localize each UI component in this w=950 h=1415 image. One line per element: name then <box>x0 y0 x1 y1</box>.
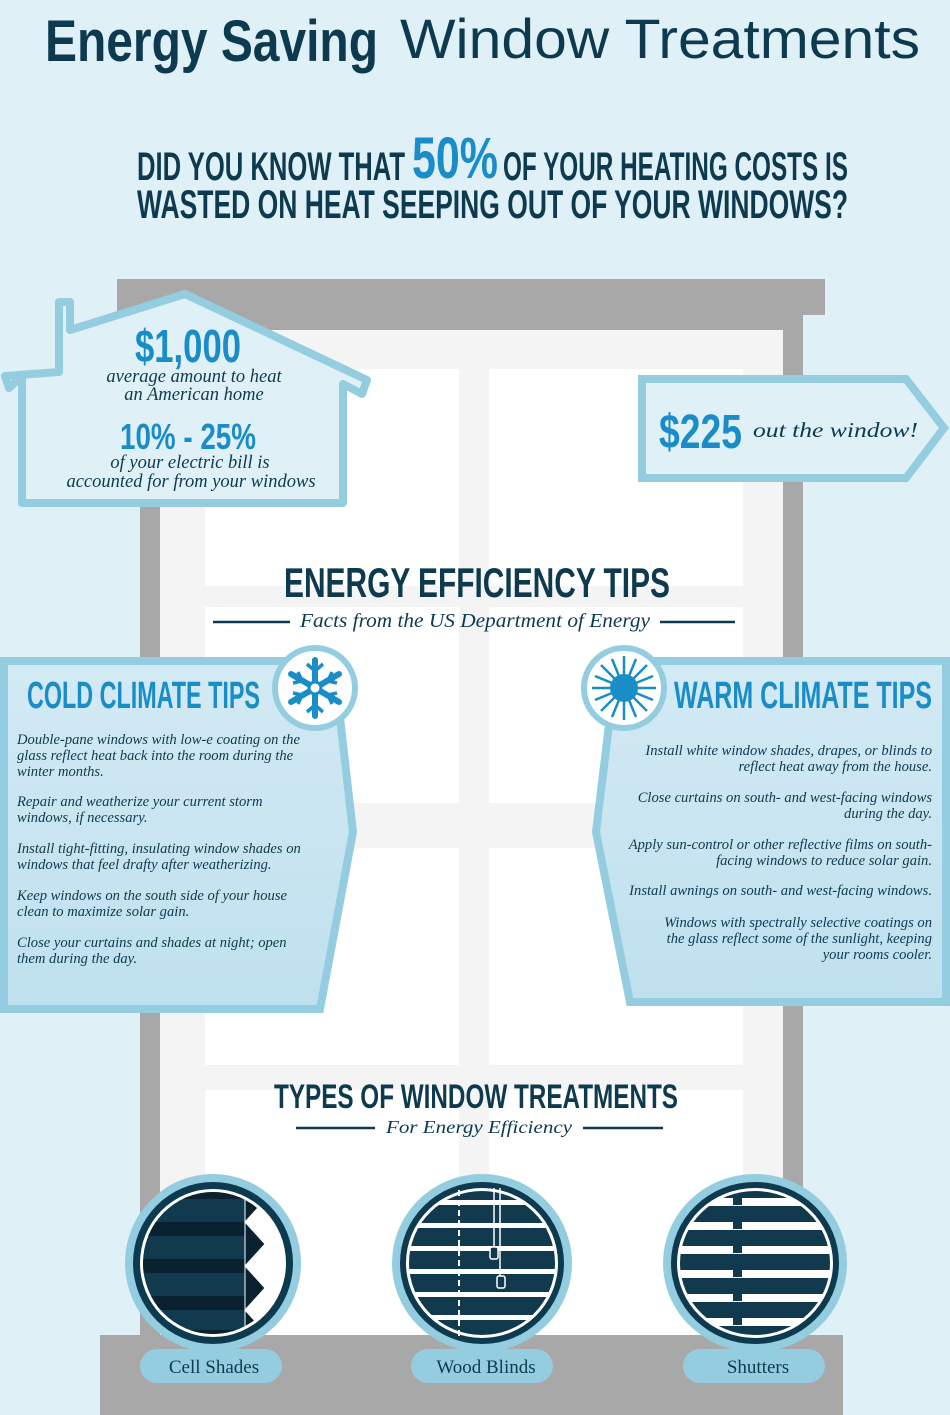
label: cell shades: Cell Shades <box>169 1357 259 1378</box>
panel: cold climate tips: windows, if necessary. <box>17 810 148 826</box>
window frame <box>100 279 843 1415</box>
icon: cell shades <box>125 1174 301 1352</box>
panel: cold climate tips: Keep windows on the south side of your house <box>16 888 287 904</box>
arrow callout: $225: out the window! <box>753 418 918 442</box>
house callout: accounted for from your windows <box>66 472 316 492</box>
panel: warm climate tips: facing windows to reduce solar gain. <box>716 853 932 869</box>
panel: cold climate tips: them during the day. <box>17 951 137 967</box>
panel: warm climate tips: during the day. <box>844 806 932 822</box>
label: shutters: Shutters <box>727 1357 789 1378</box>
house callout: an American home <box>124 385 264 405</box>
panel: cold climate tips: glass reflect heat back into the room during the <box>17 748 294 764</box>
panel: cold climate tips <box>4 648 355 1009</box>
panel: warm climate tips: Install awnings on south- and west-facing windows. <box>628 883 932 899</box>
panel: cold climate tips: clean to maximize solar gain. <box>17 904 189 920</box>
panel: warm climate tips: Windows with spectrally selective coatings on <box>664 915 932 931</box>
label: wood blinds: Wood Blinds <box>436 1357 536 1378</box>
label: cell shades <box>140 1349 282 1383</box>
headline question: 50% <box>412 126 498 191</box>
panel: warm climate tips: reflect heat away from the house. <box>739 759 932 775</box>
panel: cold climate tips: Double-pane windows with low-e coating on the <box>16 732 300 748</box>
heading: energy efficiency tips: ENERGY EFFICIENCY TIPS <box>284 559 670 606</box>
heading: types of window treatments: TYPES OF WINDOW TREATMENTS <box>274 1078 678 1116</box>
panel: warm climate tips: Close curtains on south- and west-facing windows <box>638 790 932 806</box>
panel: warm climate tips <box>584 648 946 1002</box>
title: Energy Saving <box>45 9 378 74</box>
arrow callout: $225 <box>642 379 944 478</box>
heading: types of window treatments: For Energy Efficiency <box>385 1117 572 1137</box>
panel: cold climate tips: Close your curtains and shades at night; open <box>17 935 287 951</box>
icon: wood blinds <box>392 1174 572 1352</box>
heading: energy efficiency tips: Facts from the US Department of Energy <box>299 610 650 632</box>
house callout: 10% - 25% <box>120 416 256 457</box>
panel: warm climate tips: your rooms cooler. <box>821 947 932 963</box>
heading: types of window treatments <box>274 1078 678 1137</box>
panel: cold climate tips: Repair and weatherize your current storm <box>16 794 262 810</box>
panel: warm climate tips: Apply sun-control or other reflective films on south- <box>628 837 932 853</box>
label: shutters <box>683 1349 825 1383</box>
title <box>45 7 920 74</box>
panel: cold climate tips: Install tight-fitting, insulating window shades on <box>16 841 301 857</box>
house callout <box>5 294 367 503</box>
panel: cold climate tips: COLD CLIMATE TIPS <box>27 675 260 717</box>
house callout: $1,000 <box>135 320 241 372</box>
house callout: average amount to heat <box>106 367 282 387</box>
icon: snowflake <box>275 648 355 728</box>
headline question: DID YOU KNOW THAT <box>137 145 405 189</box>
icon: shutters <box>663 1174 847 1352</box>
arrow callout: $225: $225 <box>659 406 742 459</box>
panel: warm climate tips: the glass reflect some of the sunlight, keeping <box>667 931 932 947</box>
label: wood blinds <box>411 1349 553 1383</box>
panel: warm climate tips: Install white window shades, drapes, or blinds to <box>644 743 932 759</box>
heading: energy efficiency tips <box>213 559 735 632</box>
headline question <box>137 126 848 227</box>
icon: sun <box>584 648 664 728</box>
panel: cold climate tips: winter months. <box>17 764 104 780</box>
title: Window Treatments <box>400 7 920 70</box>
panel: cold climate tips: windows that feel drafty after weatherizing. <box>17 857 272 873</box>
house callout: of your electric bill is <box>110 453 270 473</box>
